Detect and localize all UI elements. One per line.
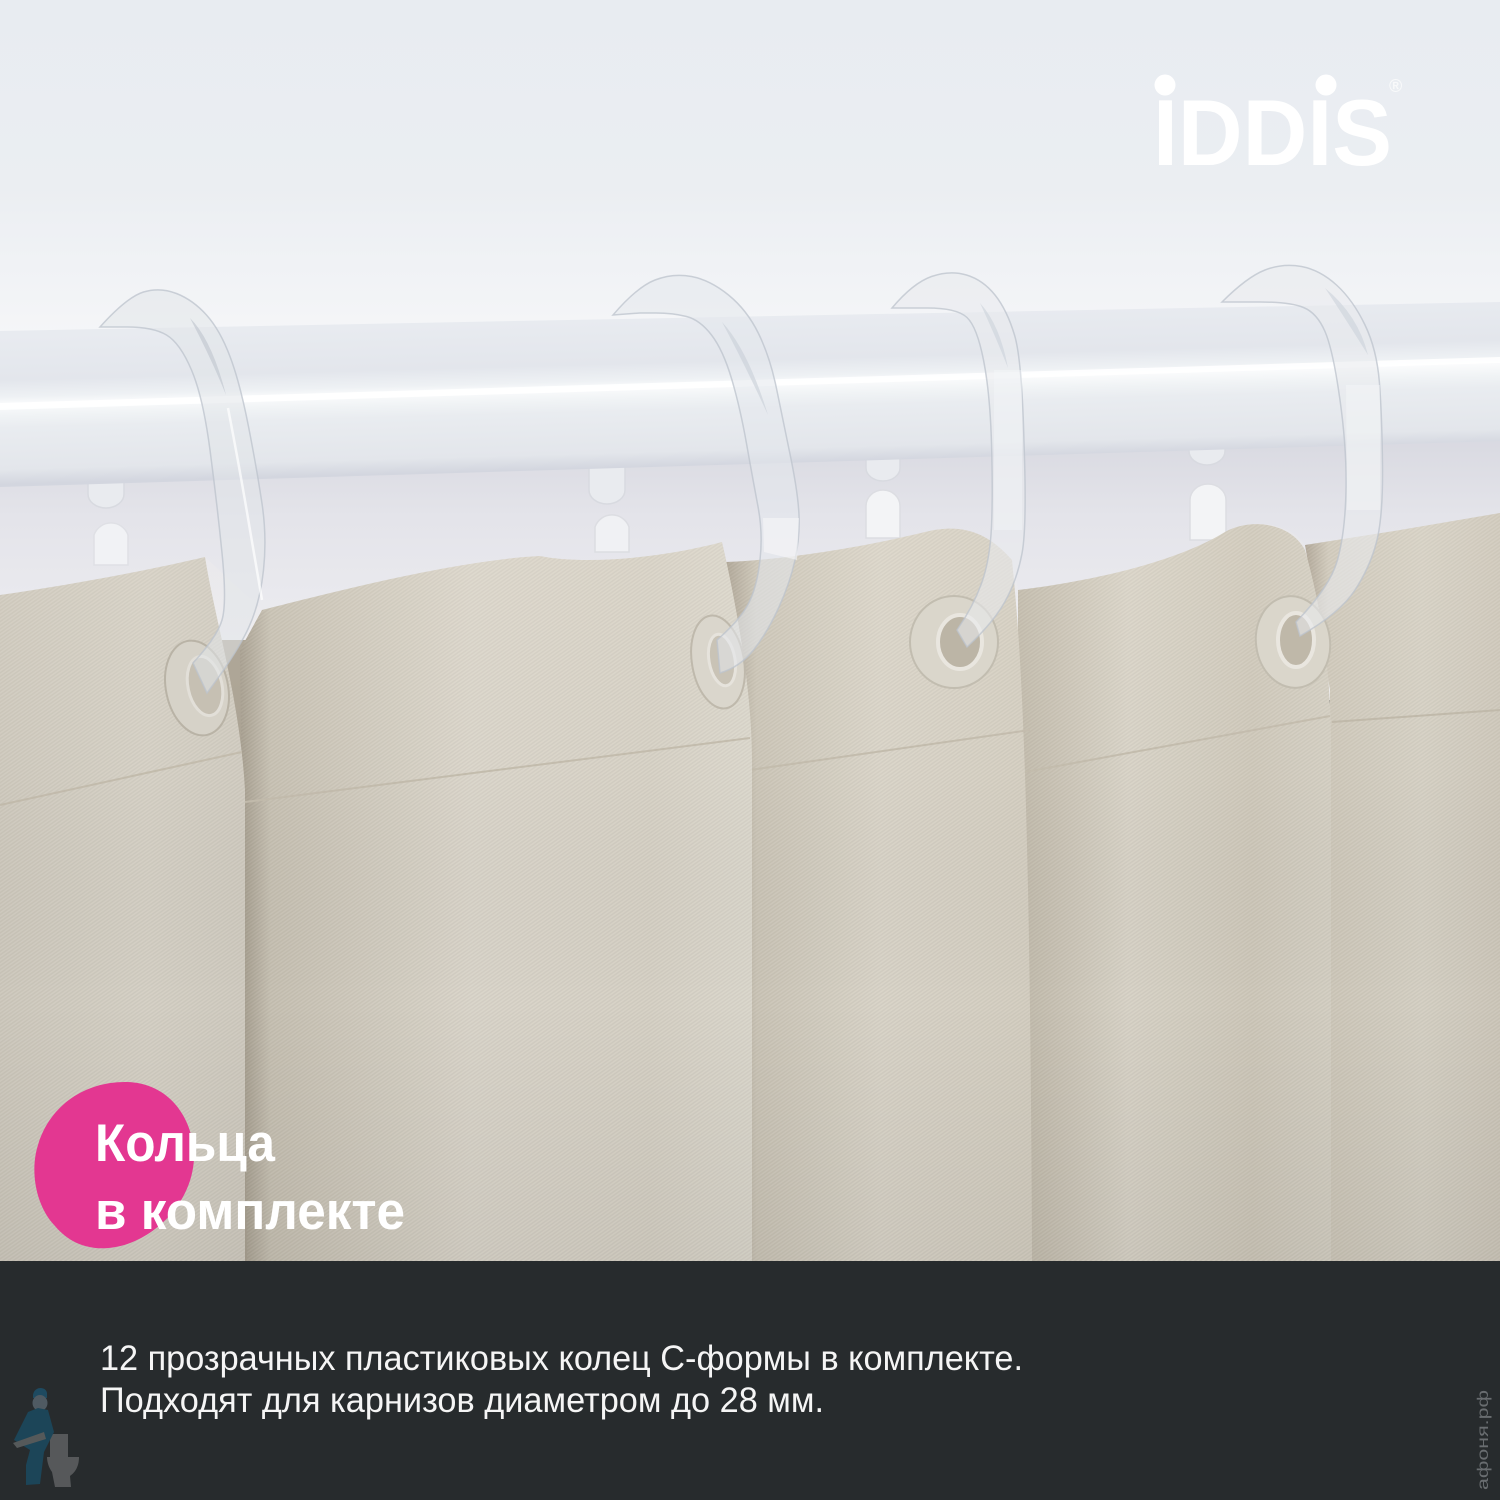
panel far left <box>0 557 245 1261</box>
ring 2 <box>613 275 799 713</box>
dark footer band <box>0 1261 1500 1500</box>
curtain rod <box>0 302 1500 487</box>
logo: iddis: IDDIS <box>1153 80 1392 185</box>
pink blob <box>34 1082 194 1248</box>
wall background <box>0 0 1500 340</box>
ring 1 <box>100 290 265 741</box>
panel far right <box>1305 513 1500 1261</box>
logo: iddis: ® <box>1389 76 1402 96</box>
panel centre left <box>240 542 752 1261</box>
ring 4 <box>1222 265 1383 693</box>
description text: 12 прозрачных пластиковых колец С-формы в комплекте. <box>100 1339 1023 1378</box>
heading: Кольца в комплекте <box>95 1114 405 1241</box>
heading: Кольца в комплекте: Кольца <box>95 1114 275 1173</box>
curtain panels <box>0 513 1500 1261</box>
ring 3 <box>892 273 1025 688</box>
description text: Подходят для карнизов диаметром до 28 мм. <box>100 1381 824 1420</box>
heading: Кольца в комплекте: в комплекте <box>95 1182 405 1241</box>
panel centre right <box>1018 524 1331 1261</box>
light falloff across the curtain <box>0 513 1500 1261</box>
hidden ring hooks behind the rod <box>88 445 1226 565</box>
description text <box>100 1339 1023 1420</box>
curtain backing in the folds <box>222 640 262 1261</box>
panel centre <box>726 529 1032 1261</box>
shaded wall below the rod <box>0 420 1500 700</box>
icon: plumber with toilet <box>13 1388 79 1487</box>
watermark: афоня.рф: афоня.рф <box>1475 1390 1492 1490</box>
